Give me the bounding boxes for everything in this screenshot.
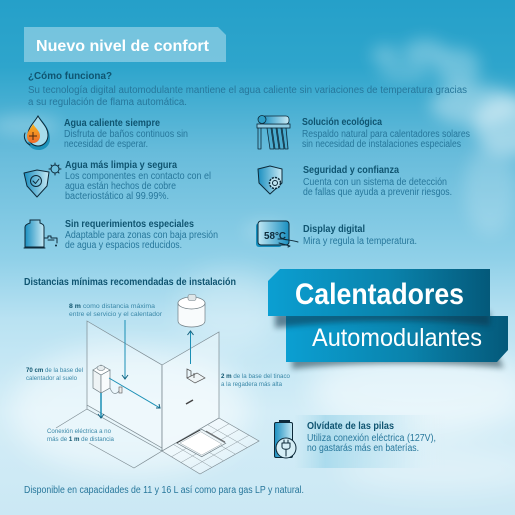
feature: seguridad y confianza: de fallas que ayuda a prevenir riesgos.: [303, 187, 452, 198]
footer note: Disponible en capacidades de 11 y 16 L así como para gas LP y natural.: [24, 485, 304, 496]
feature: agua caliente siempre: necesidad de esperar.: [64, 139, 148, 150]
feature: solución ecológica: [257, 116, 470, 150]
labels: entre el servicio y el calentador: [69, 311, 163, 318]
feature: agua más limpia y segura: [24, 160, 211, 202]
title: calentadores automodulantes: Calentadores: [295, 278, 464, 311]
icon: battery with plug: [274, 420, 296, 458]
installation diagram: [26, 294, 290, 474]
feature: seguridad y confianza: [258, 165, 452, 198]
feature: sin requerimientos especiales: Sin requerimientos especiales: [65, 219, 194, 230]
intro text: ¿Cómo funciona?: [28, 70, 112, 82]
feature: agua más limpia y segura: Los componentes en contacto con el: [65, 171, 211, 182]
icon: shield with gear: [258, 166, 282, 194]
labels: más de 1 m de distancia: [47, 436, 114, 443]
feature: seguridad y confianza: Cuenta con un sistema de detección: [303, 177, 447, 188]
callout: olvídate de las pilas: no gastarás más en baterías.: [307, 443, 419, 454]
feature: agua más limpia y segura: Agua más limpia y segura: [65, 160, 177, 171]
feature: solución ecológica: Respaldo natural para calentadores solares: [302, 129, 470, 140]
water tank: [178, 294, 205, 327]
intro text: Su tecnología digital automodulante mantiene el agua caliente sin variaciones de temperatura gracias: [28, 85, 467, 96]
feature: agua más limpia y segura: bacteriostático al 99.99%.: [65, 191, 169, 202]
labels: 70 cm de la base del: [26, 367, 83, 374]
intro text: a su regulación de flama automática.: [28, 97, 187, 108]
labels: [26, 303, 290, 443]
water heater: [93, 365, 122, 394]
icon: water tank with faucet: [24, 220, 57, 248]
feature: display digital: Display digital: [303, 224, 365, 235]
feature: display digital: [256, 221, 417, 247]
labels: 2 m de la base del tinaco: [221, 373, 290, 380]
callout: olvídate de las pilas: [274, 415, 445, 468]
title banner: Nuevo nivel de confort: [36, 38, 210, 55]
icon: solar water heater: [257, 116, 290, 149]
feature: seguridad y confianza: Seguridad y confianza: [303, 165, 399, 176]
callout: olvídate de las pilas: Utiliza conexión eléctrica (127V),: [307, 433, 436, 444]
icon: touch display 58°C: [256, 221, 298, 247]
labels: 8 m como distancia máxima: [69, 303, 155, 310]
feature: display digital: Mira y regula la temperatura.: [303, 236, 417, 247]
walls and floor: [56, 321, 219, 468]
feature: agua caliente siempre: Disfruta de baños continuos sin: [64, 129, 188, 140]
title banner: [24, 27, 226, 62]
icon: shield with germ: [24, 163, 61, 197]
heading: distancias: Distancias mínimas recomendadas de instalación: [24, 277, 236, 288]
feature: sin requerimientos especiales: Adaptable para zonas con baja presión: [65, 230, 218, 241]
labels: a la regadera más alta: [221, 381, 282, 388]
feature: sin requerimientos especiales: de agua y espacios reducidos.: [65, 240, 182, 251]
title: calentadores automodulantes: Automodulantes: [312, 324, 482, 352]
feature: sin requerimientos especiales: [24, 219, 218, 251]
icon: water drop with flame: [24, 116, 50, 150]
title: calentadores automodulantes: [268, 269, 508, 369]
feature: agua caliente siempre: [24, 116, 188, 150]
labels: calentador al suelo: [26, 375, 77, 382]
intro text: [28, 70, 467, 108]
shower fixture: [186, 369, 205, 404]
feature: solución ecológica: sin necesidad de instalaciones especiales: [302, 139, 461, 150]
feature: agua caliente siempre: Agua caliente siempre: [64, 118, 160, 129]
arrows: [98, 320, 194, 418]
feature: agua más limpia y segura: agua están hechos de cobre: [65, 181, 176, 192]
feature: solución ecológica: Solución ecológica: [302, 117, 382, 128]
floor tiles and shower base: [162, 418, 259, 474]
icon: touch display 58°C: 58°C: [264, 230, 286, 242]
callout: olvídate de las pilas: Olvídate de las pilas: [307, 421, 394, 432]
labels: Conexión eléctrica a no: [47, 428, 111, 435]
